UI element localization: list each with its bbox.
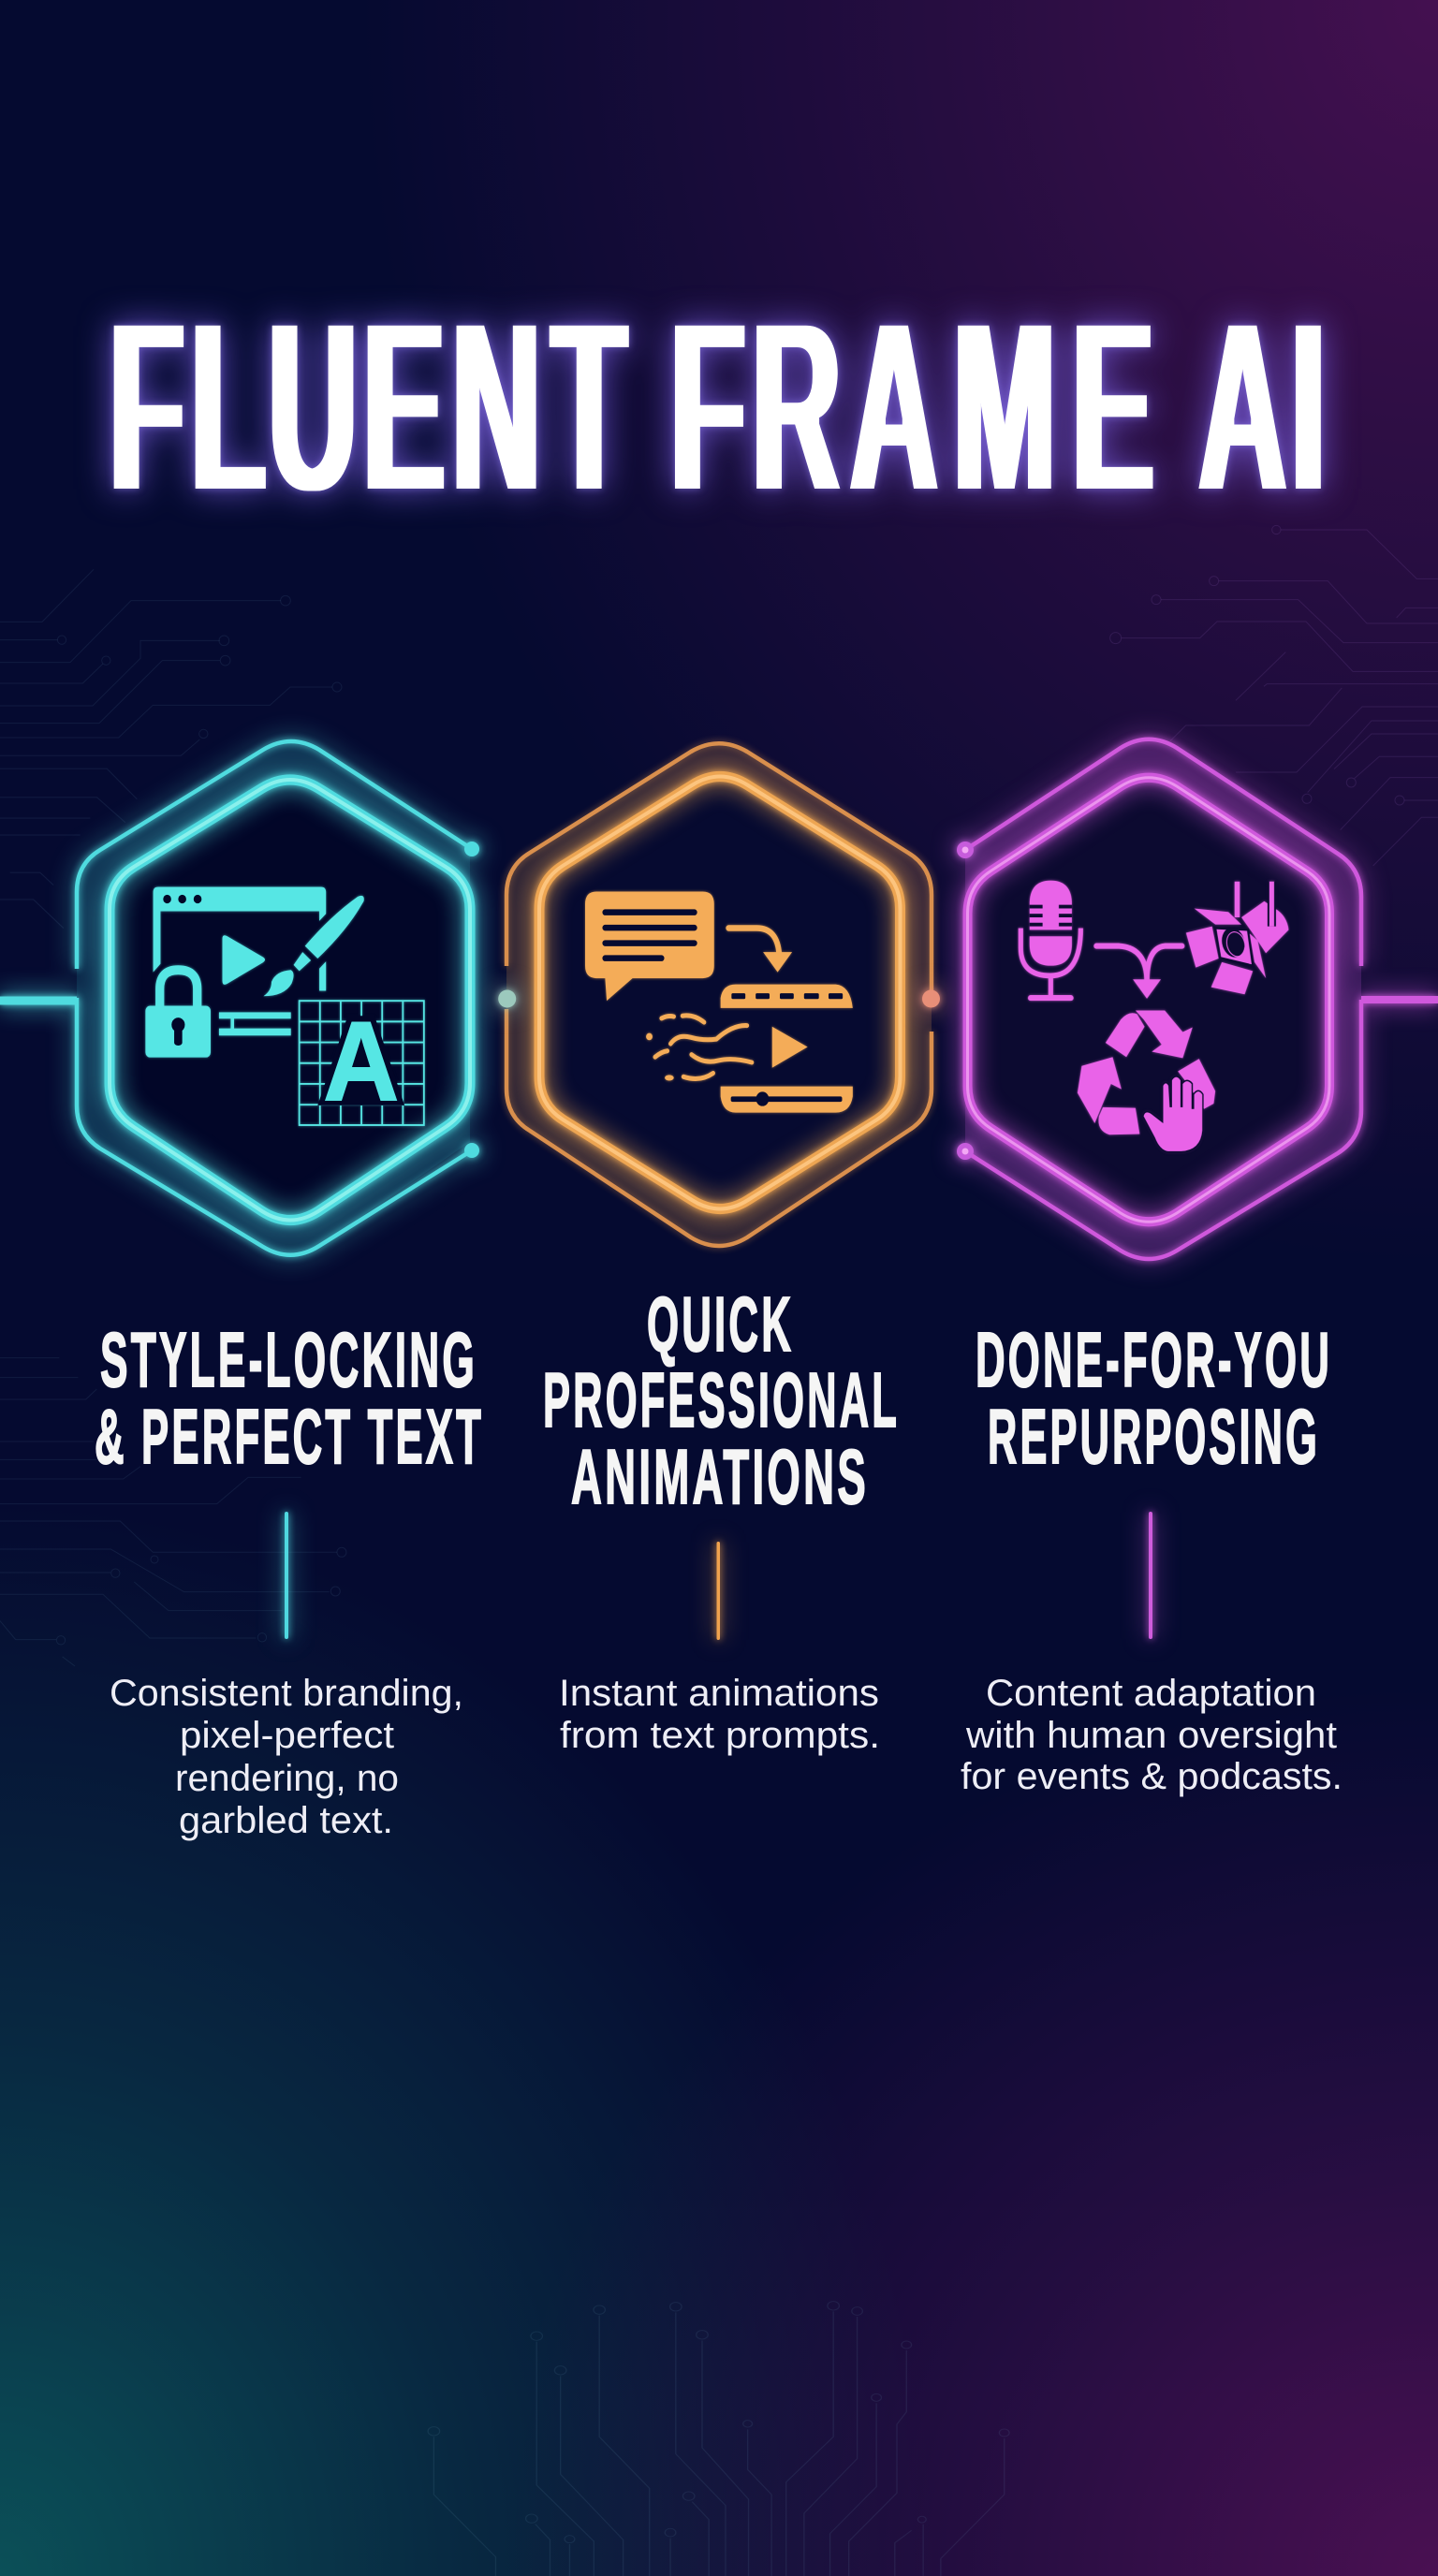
circuit traces: bottom: [428, 2302, 1009, 2576]
hexagon frame: orange: [506, 743, 932, 1246]
text: description: pixel-perfect: [180, 1715, 394, 1756]
text: grid letter A: A: [323, 1000, 399, 1124]
panel: style-locking and perfect text: [0, 741, 484, 1841]
circuit traces: lower left: [0, 1358, 346, 1666]
text: description: [559, 1673, 880, 1756]
text: description: [110, 1673, 463, 1841]
heading: style-locking: STYLE-LOCKING: [100, 1316, 477, 1403]
heading: style-locking: & PERFECT TEXT: [95, 1393, 484, 1480]
divider: cyan: [285, 1512, 288, 1639]
icon: text prompt to animation: [585, 891, 853, 1113]
panel: done-for-you repurposing: [957, 739, 1438, 1797]
heading: quick professional animations: QUICK: [647, 1281, 794, 1368]
text: description: Consistent branding,: [110, 1673, 463, 1714]
icon: video window, brush, lock and text grid: [145, 886, 424, 1125]
circuit traces: upper right: [1110, 525, 1438, 866]
panel: quick professional animations: [498, 743, 940, 1756]
text: description: with human oversight: [965, 1715, 1337, 1756]
circuit traces: upper left: [0, 569, 342, 755]
hexagon frame: cyan: [0, 741, 479, 1255]
text: description: from text prompts.: [560, 1715, 880, 1756]
text: description: rendering, no: [175, 1758, 399, 1799]
text: description: Content adaptation: [986, 1673, 1316, 1714]
heading: quick professional animations: [543, 1281, 900, 1520]
heading: quick professional animations: PROFESSIONAL: [543, 1356, 900, 1443]
title: FLUENT FRAME AI: [110, 269, 1326, 544]
text: description: for events & podcasts.: [961, 1756, 1343, 1797]
icon: microphone, spotlight, recycle and hand: [1020, 881, 1288, 1151]
circuit traces: mid left: [0, 768, 137, 929]
text: description: Instant animations: [559, 1673, 879, 1714]
node: left connector: [498, 990, 516, 1007]
text: description: [961, 1673, 1343, 1797]
heading: style-locking: [95, 1316, 484, 1480]
heading: done-for-you repurposing: [976, 1316, 1332, 1480]
text: description: garbled text.: [179, 1800, 393, 1841]
hexagon frame: magenta: [957, 739, 1438, 1259]
node: right connector: [922, 990, 940, 1007]
divider: magenta: [1149, 1512, 1152, 1639]
divider: orange: [717, 1542, 720, 1640]
heading: quick professional animations: ANIMATIONS: [571, 1433, 869, 1520]
